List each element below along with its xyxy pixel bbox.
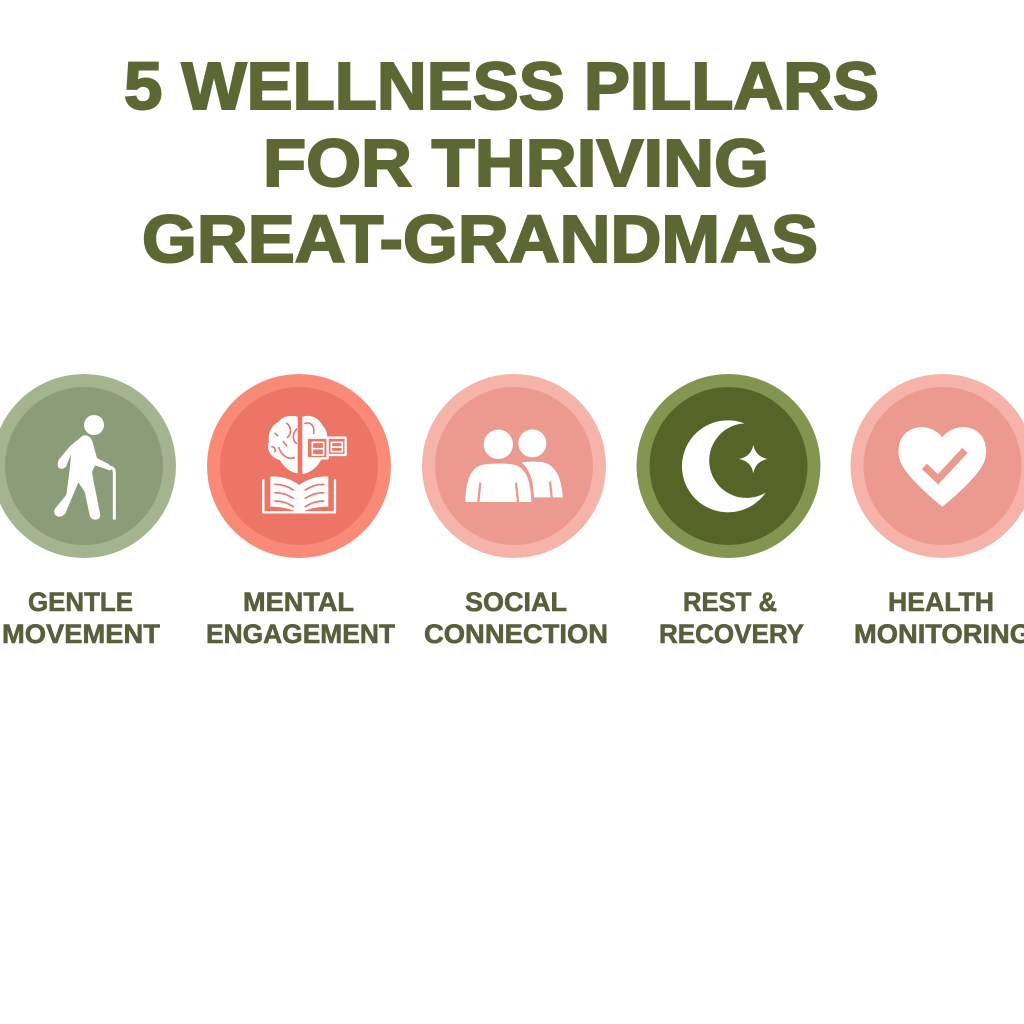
- panel: health monitoring: [850, 374, 1024, 649]
- icon: heart with check mark: [899, 427, 986, 507]
- icon: two people: [465, 429, 563, 502]
- label: rest and recovery: RECOVERY: [659, 619, 804, 649]
- label: gentle movement: [2, 587, 160, 649]
- title: 5 WELLNESS PILLARS: [124, 49, 879, 124]
- label: social connection: CONNECTION: [424, 619, 608, 649]
- label: gentle movement: MOVEMENT: [2, 619, 160, 649]
- label: rest and recovery: REST &: [683, 587, 777, 617]
- label: gentle movement: GENTLE: [28, 587, 133, 617]
- panel: gentle movement: [0, 374, 176, 649]
- badge: mental engagement: [207, 374, 391, 558]
- badge: rest and recovery: [636, 374, 820, 558]
- panel: social connection: [422, 374, 608, 649]
- badge: social connection: [422, 374, 606, 558]
- panel: mental engagement: [206, 374, 395, 649]
- label: mental engagement: ENGAGEMENT: [206, 619, 395, 649]
- label: social connection: SOCIAL: [465, 587, 567, 617]
- label: mental engagement: MENTAL: [243, 587, 354, 617]
- badge: gentle movement: [0, 374, 176, 558]
- label: social connection: [424, 587, 608, 649]
- label: mental engagement: [206, 587, 395, 649]
- label: health monitoring: HEALTH: [888, 587, 994, 617]
- title: GREAT-GRANDMAS: [142, 202, 818, 277]
- title: FOR THRIVING: [263, 126, 769, 201]
- title: [124, 49, 879, 277]
- icon: crescent moon and star: [682, 420, 768, 512]
- icon: brain and books: [263, 416, 346, 514]
- badge: health monitoring: [850, 374, 1024, 558]
- label: rest and recovery: [659, 587, 804, 649]
- label: health monitoring: [854, 587, 1024, 649]
- label: health monitoring: MONITORING: [854, 619, 1024, 649]
- icon: walking person with cane: [54, 415, 114, 519]
- panel: rest and recovery: [636, 374, 820, 649]
